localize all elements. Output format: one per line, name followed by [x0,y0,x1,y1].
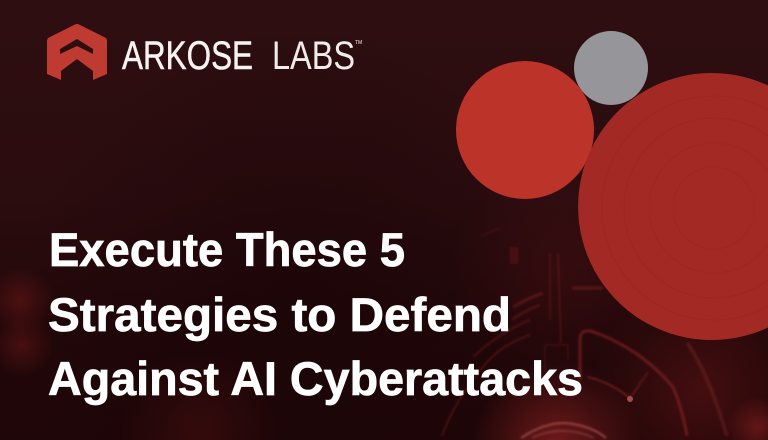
concentric glow [521,423,606,438]
wordmark: ARKOSE: ARKOSE [122,34,253,78]
logo [47,24,362,80]
wordmark: LABS: LABS [272,34,355,78]
title line 1: Execute These 5 [49,223,405,276]
circle: grey [574,31,648,105]
circle: red large with rings [578,73,768,340]
trademark: TM [355,40,362,46]
title line 2: Strategies to Defend [48,288,511,341]
circuit lines [442,228,727,436]
title [48,223,583,405]
icon: Arkose hexagon mark [47,24,107,80]
circle: red medium [456,61,594,199]
circuit node [627,396,633,402]
title line 3: Against AI Cyberattacks [48,352,583,405]
